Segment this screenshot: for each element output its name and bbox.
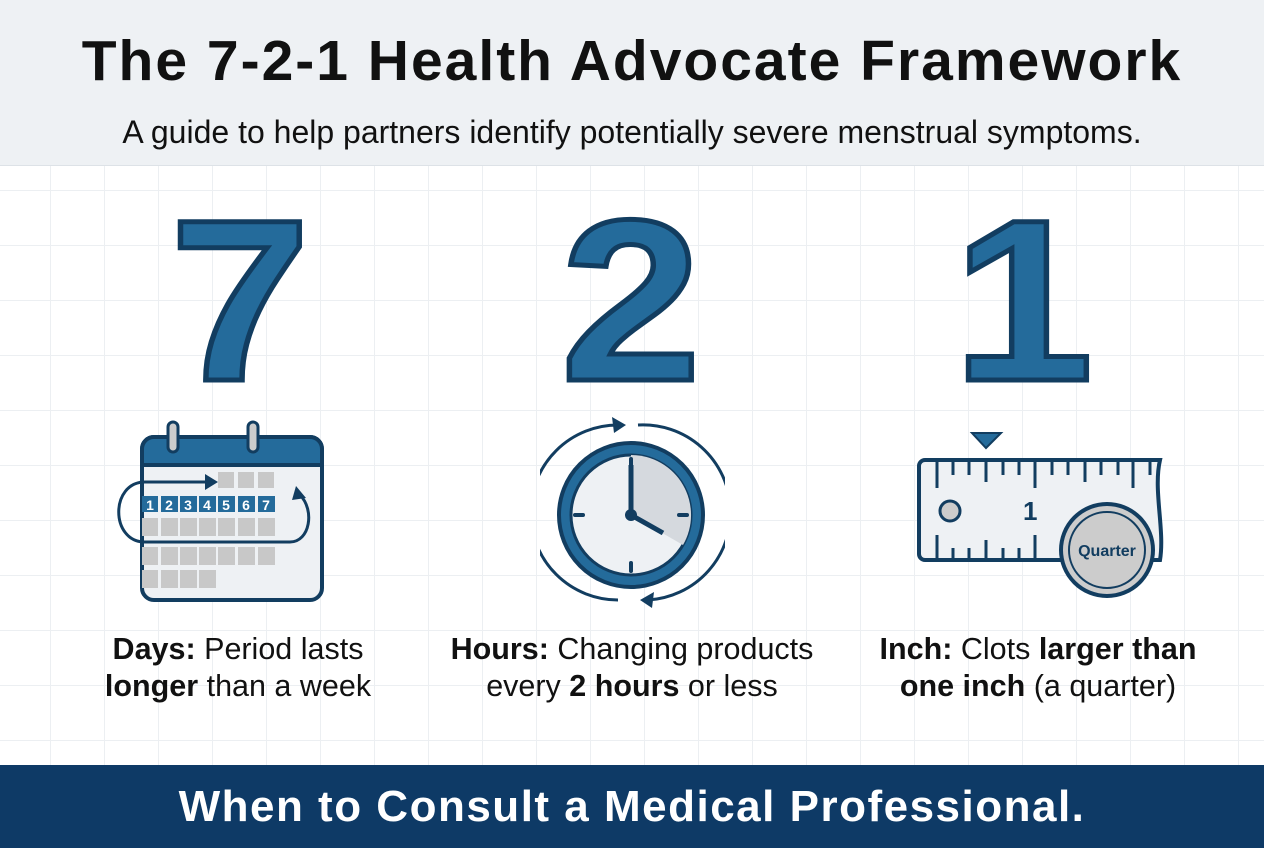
text: inch — [880, 632, 1196, 703]
text: hours: Hours: Changing products — [451, 632, 813, 666]
text: inch: Inch: Clots larger than — [880, 632, 1196, 666]
text: hours: every 2 hours or less — [486, 669, 778, 703]
subtitle: A guide to help partners identify potentially severe menstrual symptoms. — [122, 114, 1142, 150]
icon: calendar: 7 — [262, 497, 270, 513]
icon: clock — [540, 417, 725, 608]
number 1: 1 — [953, 172, 1093, 429]
icon: calendar: 3 — [184, 497, 192, 513]
text: days — [105, 632, 372, 703]
text: days: longer than a week — [105, 669, 371, 703]
icon: ruler with quarter: 1 — [1023, 496, 1037, 526]
header — [0, 0, 1264, 166]
text: inch: one inch (a quarter) — [900, 669, 1176, 703]
number 7: 7 — [170, 172, 310, 429]
icon: calendar: 1 — [146, 497, 154, 513]
icon: calendar: 4 — [203, 497, 211, 513]
footer banner: When to Consult a Medical Professional. — [179, 782, 1085, 831]
footer banner — [0, 765, 1264, 848]
icon: calendar — [117, 420, 324, 602]
number 2: 2 — [561, 172, 701, 429]
icon: calendar: 6 — [242, 497, 250, 513]
icon: calendar: 2 — [165, 497, 173, 513]
title: The 7-2-1 Health Advocate Framework — [82, 29, 1182, 93]
icon: ruler with quarter — [917, 432, 1164, 598]
icon: calendar: 5 — [222, 497, 230, 513]
text: hours — [451, 632, 813, 703]
icon: ruler with quarter: Quarter — [1078, 543, 1136, 560]
text: days: Days: Period lasts — [113, 632, 363, 666]
